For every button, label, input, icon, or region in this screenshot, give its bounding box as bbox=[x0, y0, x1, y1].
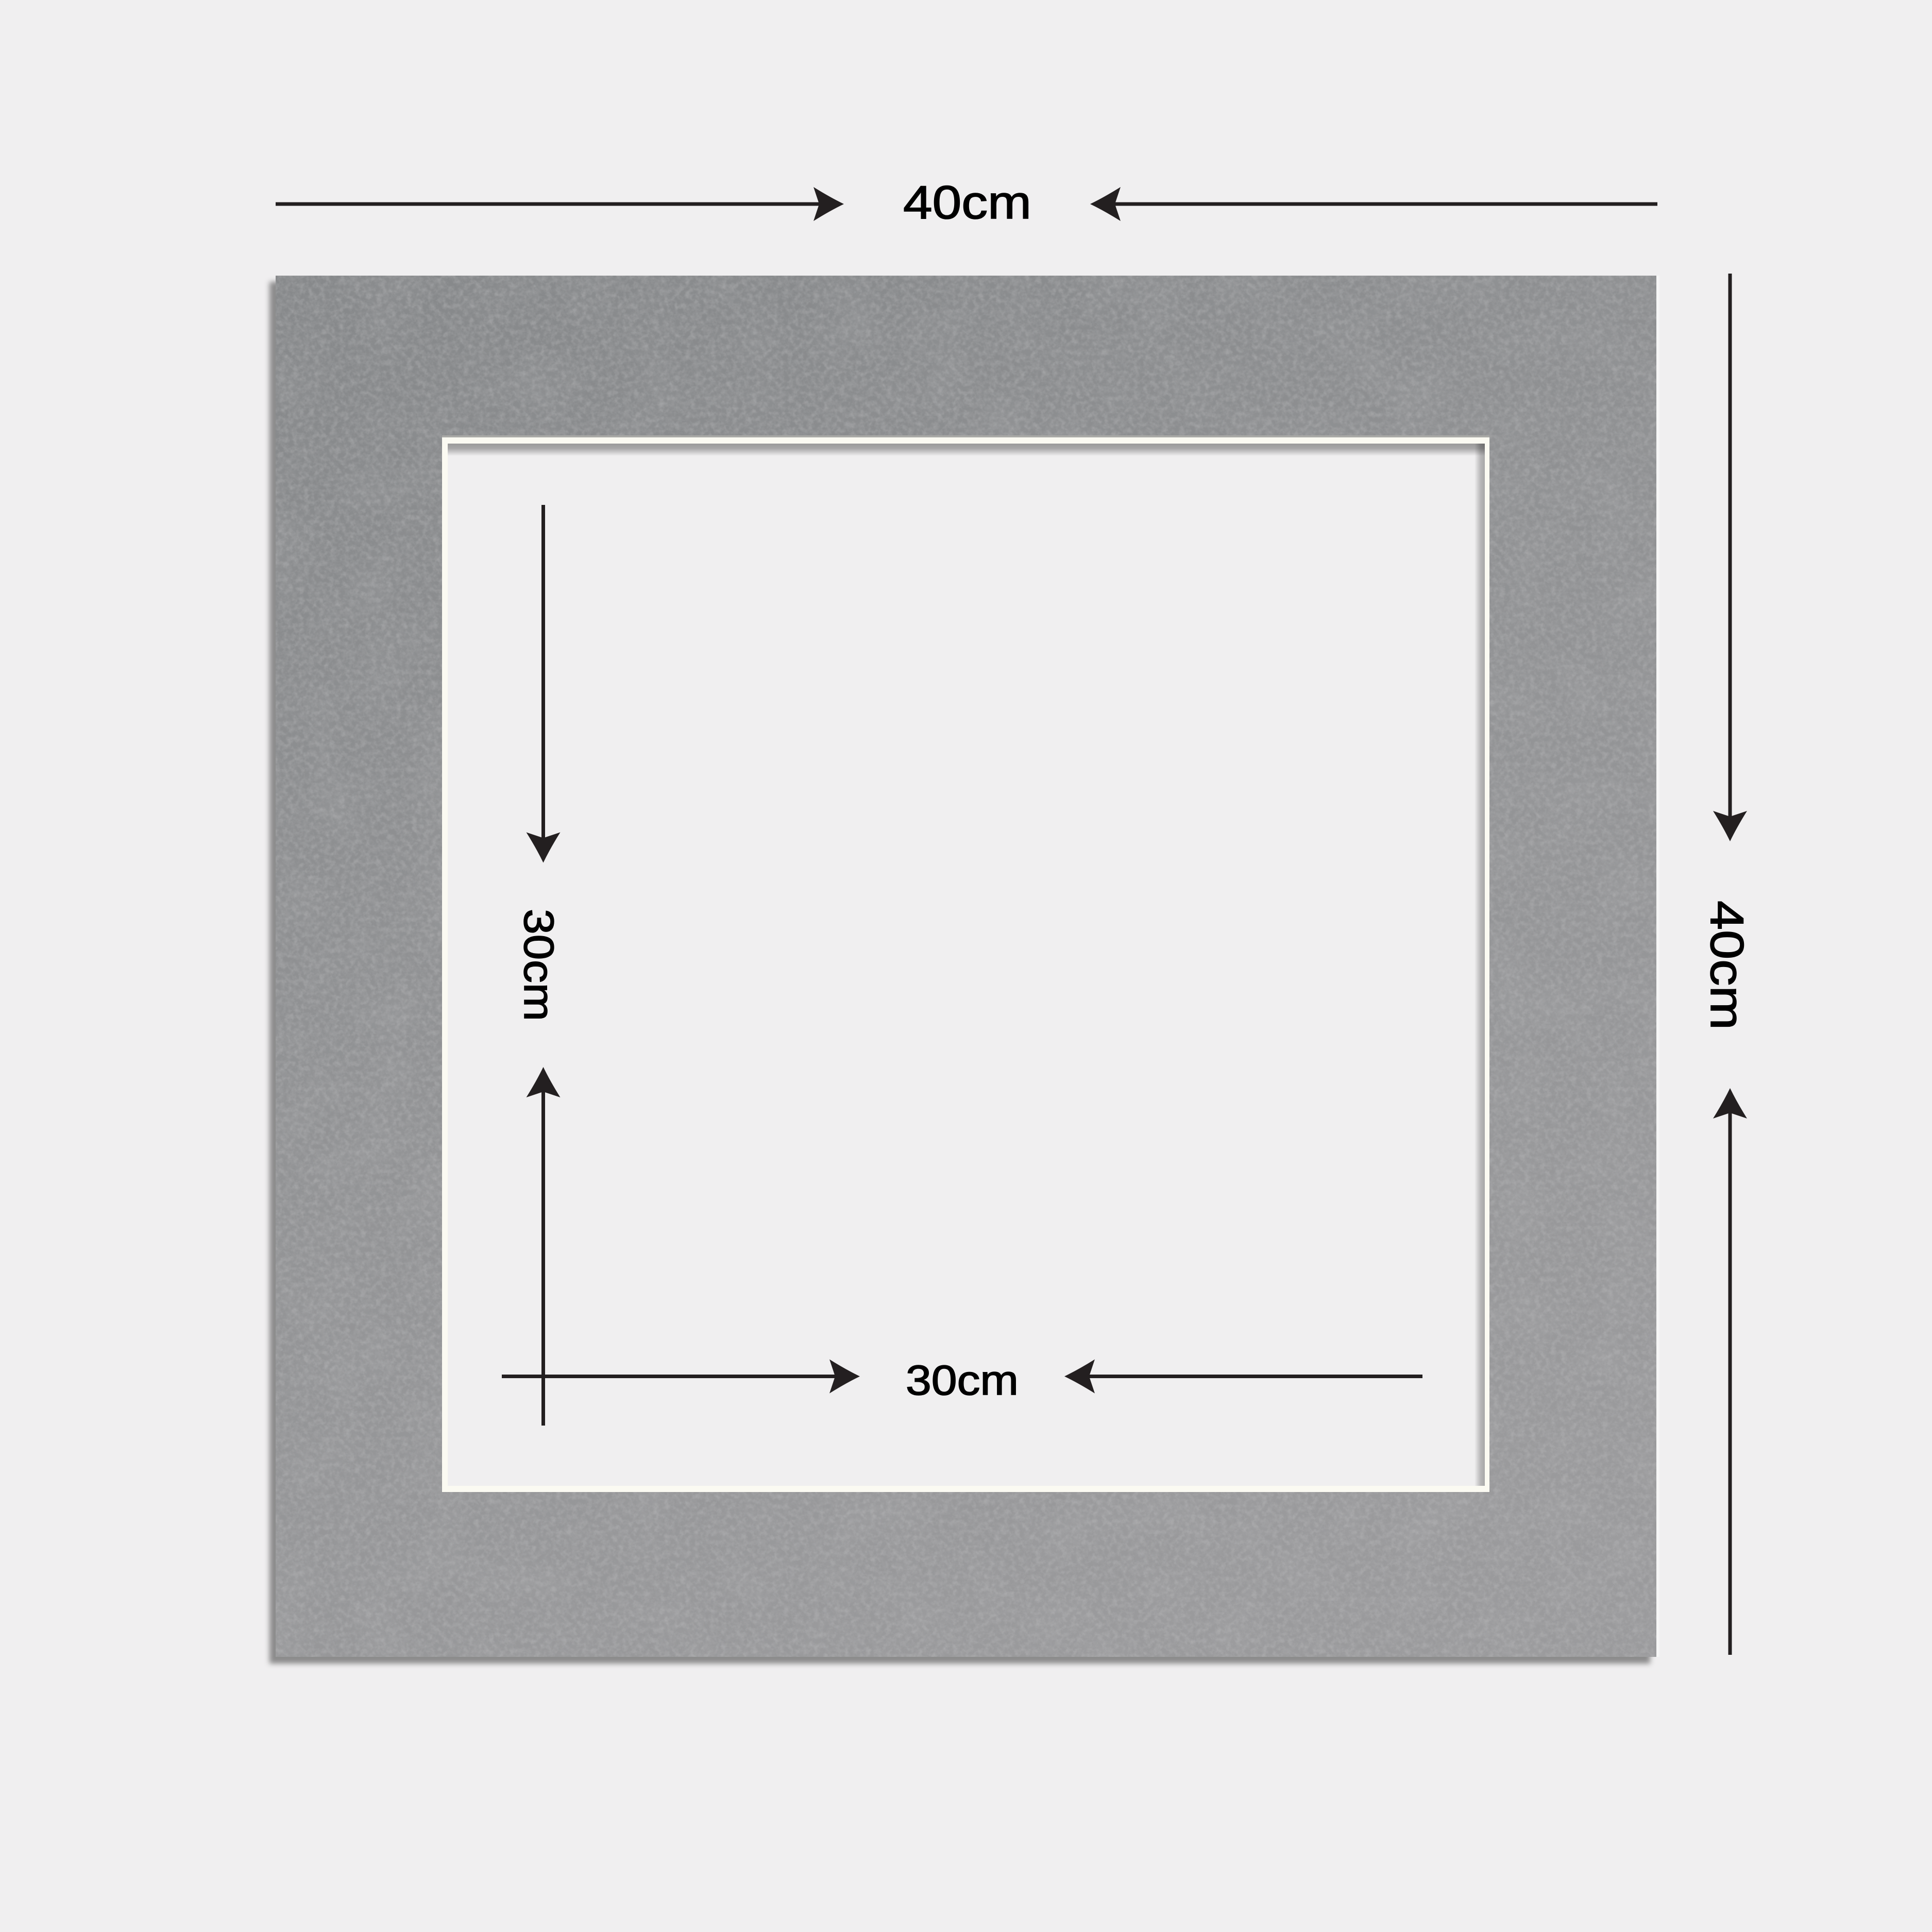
label: window width: 30cm bbox=[906, 1357, 1019, 1404]
bevel shade above window bbox=[442, 435, 1489, 437]
arrow: window height top bbox=[527, 505, 561, 862]
label: window height: 30cm bbox=[515, 909, 562, 1021]
arrow: outer height top bbox=[1713, 274, 1747, 841]
paper grain light bbox=[276, 276, 1656, 1657]
inner shadow top bbox=[448, 444, 1485, 456]
inner shadow right bbox=[1475, 444, 1485, 1486]
arrow: window width left bbox=[502, 1359, 860, 1393]
mount board surface bbox=[276, 276, 1656, 1657]
arrow: outer width left bbox=[276, 187, 844, 221]
arrow: outer height bottom bbox=[1713, 1088, 1747, 1655]
window opening bbox=[448, 444, 1485, 1486]
right edge highlight bbox=[1656, 276, 1659, 1657]
label: outer height: 40cm bbox=[1701, 901, 1753, 1030]
paper grain dark bbox=[276, 276, 1656, 1657]
arrow: outer width right bbox=[1090, 187, 1657, 221]
panel: grey mount board bbox=[269, 276, 1659, 1664]
label: outer width: 40cm bbox=[903, 177, 1031, 229]
mount board drop shadow bbox=[269, 282, 1650, 1664]
large soft blotches bbox=[276, 276, 1656, 1657]
cream bevel edge bbox=[442, 437, 1489, 1492]
arrow: window width right bbox=[1064, 1359, 1422, 1393]
arrow: window height bottom bbox=[527, 1067, 561, 1426]
panel: window aperture bbox=[442, 435, 1489, 1492]
